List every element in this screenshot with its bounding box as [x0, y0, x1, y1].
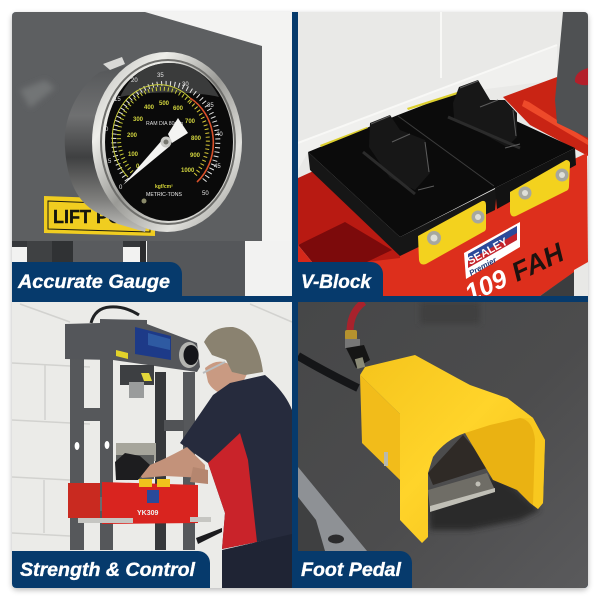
control panel — [135, 327, 171, 360]
cover side — [360, 375, 400, 480]
red frame — [367, 153, 588, 296]
gauge outer numbers: 0 — [119, 185, 123, 191]
pedal mechanism — [428, 435, 495, 512]
gauge body — [65, 97, 146, 232]
gauge outer numbers: 40 — [216, 132, 223, 138]
label: strength and control: Strength & Control — [20, 560, 196, 581]
gauge inner numbers: 200 — [127, 133, 138, 139]
panel: v-block — [298, 12, 588, 308]
label: accurate gauge: Accurate Gauge — [17, 272, 170, 293]
air hose red — [345, 302, 370, 369]
gauge inner numbers: 1000 — [181, 168, 195, 174]
hair — [204, 327, 263, 375]
arms — [137, 447, 205, 478]
label: v-block — [298, 262, 383, 296]
pedal shadow — [428, 475, 540, 530]
hose black — [298, 356, 358, 388]
icon: pressure gauge: RAM DIA 80mm — [146, 121, 183, 127]
gray upright — [555, 12, 588, 138]
label: accurate gauge — [12, 262, 182, 296]
label: foot pedal: Foot Pedal — [301, 560, 402, 581]
gauge inner numbers: 300 — [133, 117, 144, 123]
gauge outer numbers: 35 — [207, 103, 214, 109]
v-block left — [363, 115, 434, 194]
gauge inner numbers: 600 — [173, 106, 184, 112]
gauge scales — [114, 83, 218, 182]
neck and face — [205, 362, 248, 394]
gauge outer numbers: 20 — [131, 78, 138, 84]
gauge inner numbers: 100 — [128, 152, 139, 158]
gauge outer numbers: 0 — [105, 127, 109, 133]
sealey logo: SEALEY — [466, 235, 511, 268]
gauge outer numbers: 5 — [108, 159, 112, 165]
label: v-block: V-Block — [301, 272, 372, 293]
panel: foot pedal — [298, 302, 588, 588]
worker — [115, 327, 292, 588]
label: strength and control — [12, 551, 210, 588]
model lettering: FAH — [507, 237, 569, 287]
gauge outer numbers: 35 — [157, 73, 164, 79]
panel: accurate gauge — [12, 12, 292, 296]
gauge inner numbers — [127, 101, 202, 174]
v-block right — [448, 80, 520, 148]
workpiece — [116, 443, 156, 461]
base plate — [308, 92, 576, 256]
gauge outer numbers: 30 — [182, 82, 189, 88]
icon: pressure gauge: METRIC-TONS — [146, 192, 182, 198]
label: foot pedal — [298, 551, 412, 588]
cover top and front — [360, 355, 533, 543]
sealey logo: Premier — [468, 255, 499, 278]
press head plate — [12, 12, 262, 241]
gauge inner numbers: 500 — [159, 101, 170, 107]
gauge dial — [105, 63, 233, 221]
yellow bracket left — [418, 201, 486, 264]
gauge inner numbers: 900 — [190, 153, 201, 159]
metal bracket — [298, 467, 367, 551]
wall blocks — [298, 45, 557, 170]
sealey logo — [464, 222, 520, 279]
shirt — [180, 375, 292, 549]
red rear frame — [503, 77, 588, 156]
yellow cover — [360, 355, 545, 543]
cover right wall — [465, 398, 545, 509]
trousers — [222, 534, 292, 588]
red shirt panel — [208, 433, 257, 549]
panel: strength and control — [12, 302, 292, 588]
red table — [68, 483, 100, 518]
gauge inner numbers: 800 — [191, 136, 202, 142]
gauge outer numbers: 45 — [214, 164, 221, 170]
gauge inner numbers: 0 — [136, 164, 140, 170]
icon: pressure gauge — [65, 52, 242, 232]
cover right rim — [507, 398, 545, 509]
icon: pressure gauge: kgf/cm² — [155, 184, 173, 190]
gauge inner numbers: 700 — [185, 119, 196, 125]
gauge inner numbers: 400 — [144, 105, 155, 111]
hydraulic press — [65, 307, 211, 550]
warning sticker — [44, 196, 155, 236]
yellow bracket right — [510, 160, 570, 216]
hydraulic press: YK309 — [137, 510, 159, 517]
model lettering: 109 — [460, 263, 512, 308]
wall blocks — [12, 304, 292, 536]
gauge bezel — [92, 52, 242, 232]
warning sticker: LIFT POINT — [53, 207, 151, 227]
gauge outer numbers: 50 — [202, 191, 209, 197]
dividers — [292, 12, 298, 588]
small gauge — [179, 342, 199, 368]
gauge needle — [123, 118, 188, 185]
gauge outer numbers: 15 — [114, 97, 121, 103]
gauge outer numbers — [105, 73, 223, 197]
glove — [115, 453, 150, 480]
model lettering — [466, 242, 563, 296]
